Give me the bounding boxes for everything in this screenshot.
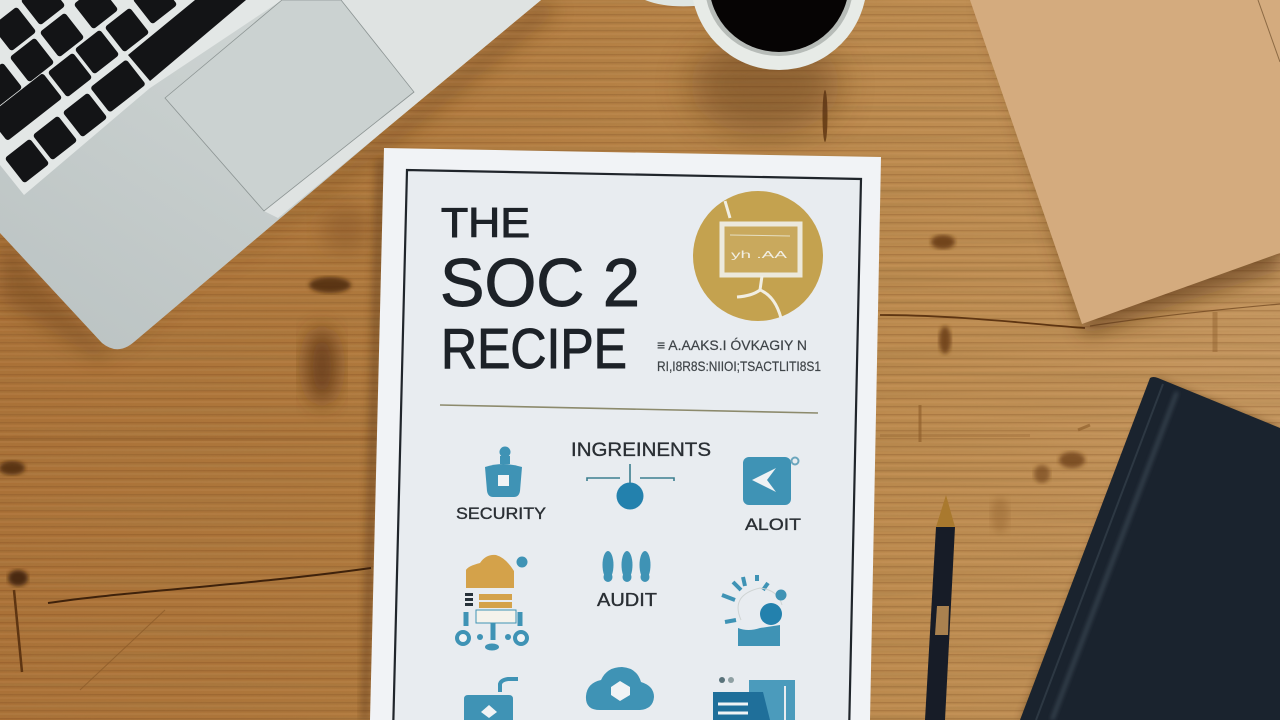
icon: balance with round weight xyxy=(587,464,674,510)
gold circle emblem with monitor: yh .AA xyxy=(731,250,788,261)
coffee cup xyxy=(645,0,867,135)
document title: SOC 2 xyxy=(440,245,640,321)
trackpad xyxy=(165,0,414,211)
small subtitle text: ≡ A.AAKS.I ÓVKAGIY N xyxy=(657,337,807,353)
document title: THE xyxy=(441,199,530,246)
tan folder xyxy=(970,0,1280,335)
small subtitle text xyxy=(657,337,821,374)
icon: open padlock xyxy=(464,679,518,720)
small subtitle text: RI,I8R8S:NIIOI;TSACTLITI8S1 xyxy=(657,358,821,374)
document title: RECIPE xyxy=(441,317,627,381)
document title xyxy=(440,199,640,381)
icon: cloud xyxy=(586,667,654,710)
laptop xyxy=(0,0,560,360)
icon: security bottle lock xyxy=(485,446,522,497)
divider rule xyxy=(440,405,818,413)
paper sheet xyxy=(360,148,881,720)
icon: person under sunburst xyxy=(722,575,786,646)
label: security: SECURITY xyxy=(456,504,546,523)
icon: three people figures xyxy=(602,551,650,582)
keyboard well xyxy=(0,0,282,195)
icon: file documents xyxy=(713,677,795,720)
laptop rim highlight xyxy=(264,0,541,218)
paper inner frame xyxy=(393,170,861,720)
label: aloit: ALOIT xyxy=(745,515,801,534)
gold circle emblem with monitor xyxy=(693,191,823,321)
black and gold pen xyxy=(925,495,955,720)
ingredients heading: INGREINENTS xyxy=(571,440,711,461)
icon: gold jar on server xyxy=(457,555,528,650)
dark notebook xyxy=(1020,377,1280,720)
icon: teal back-arrow tile xyxy=(743,457,798,505)
label: audit: AUDIT xyxy=(597,590,657,610)
keyboard keys xyxy=(0,0,246,183)
